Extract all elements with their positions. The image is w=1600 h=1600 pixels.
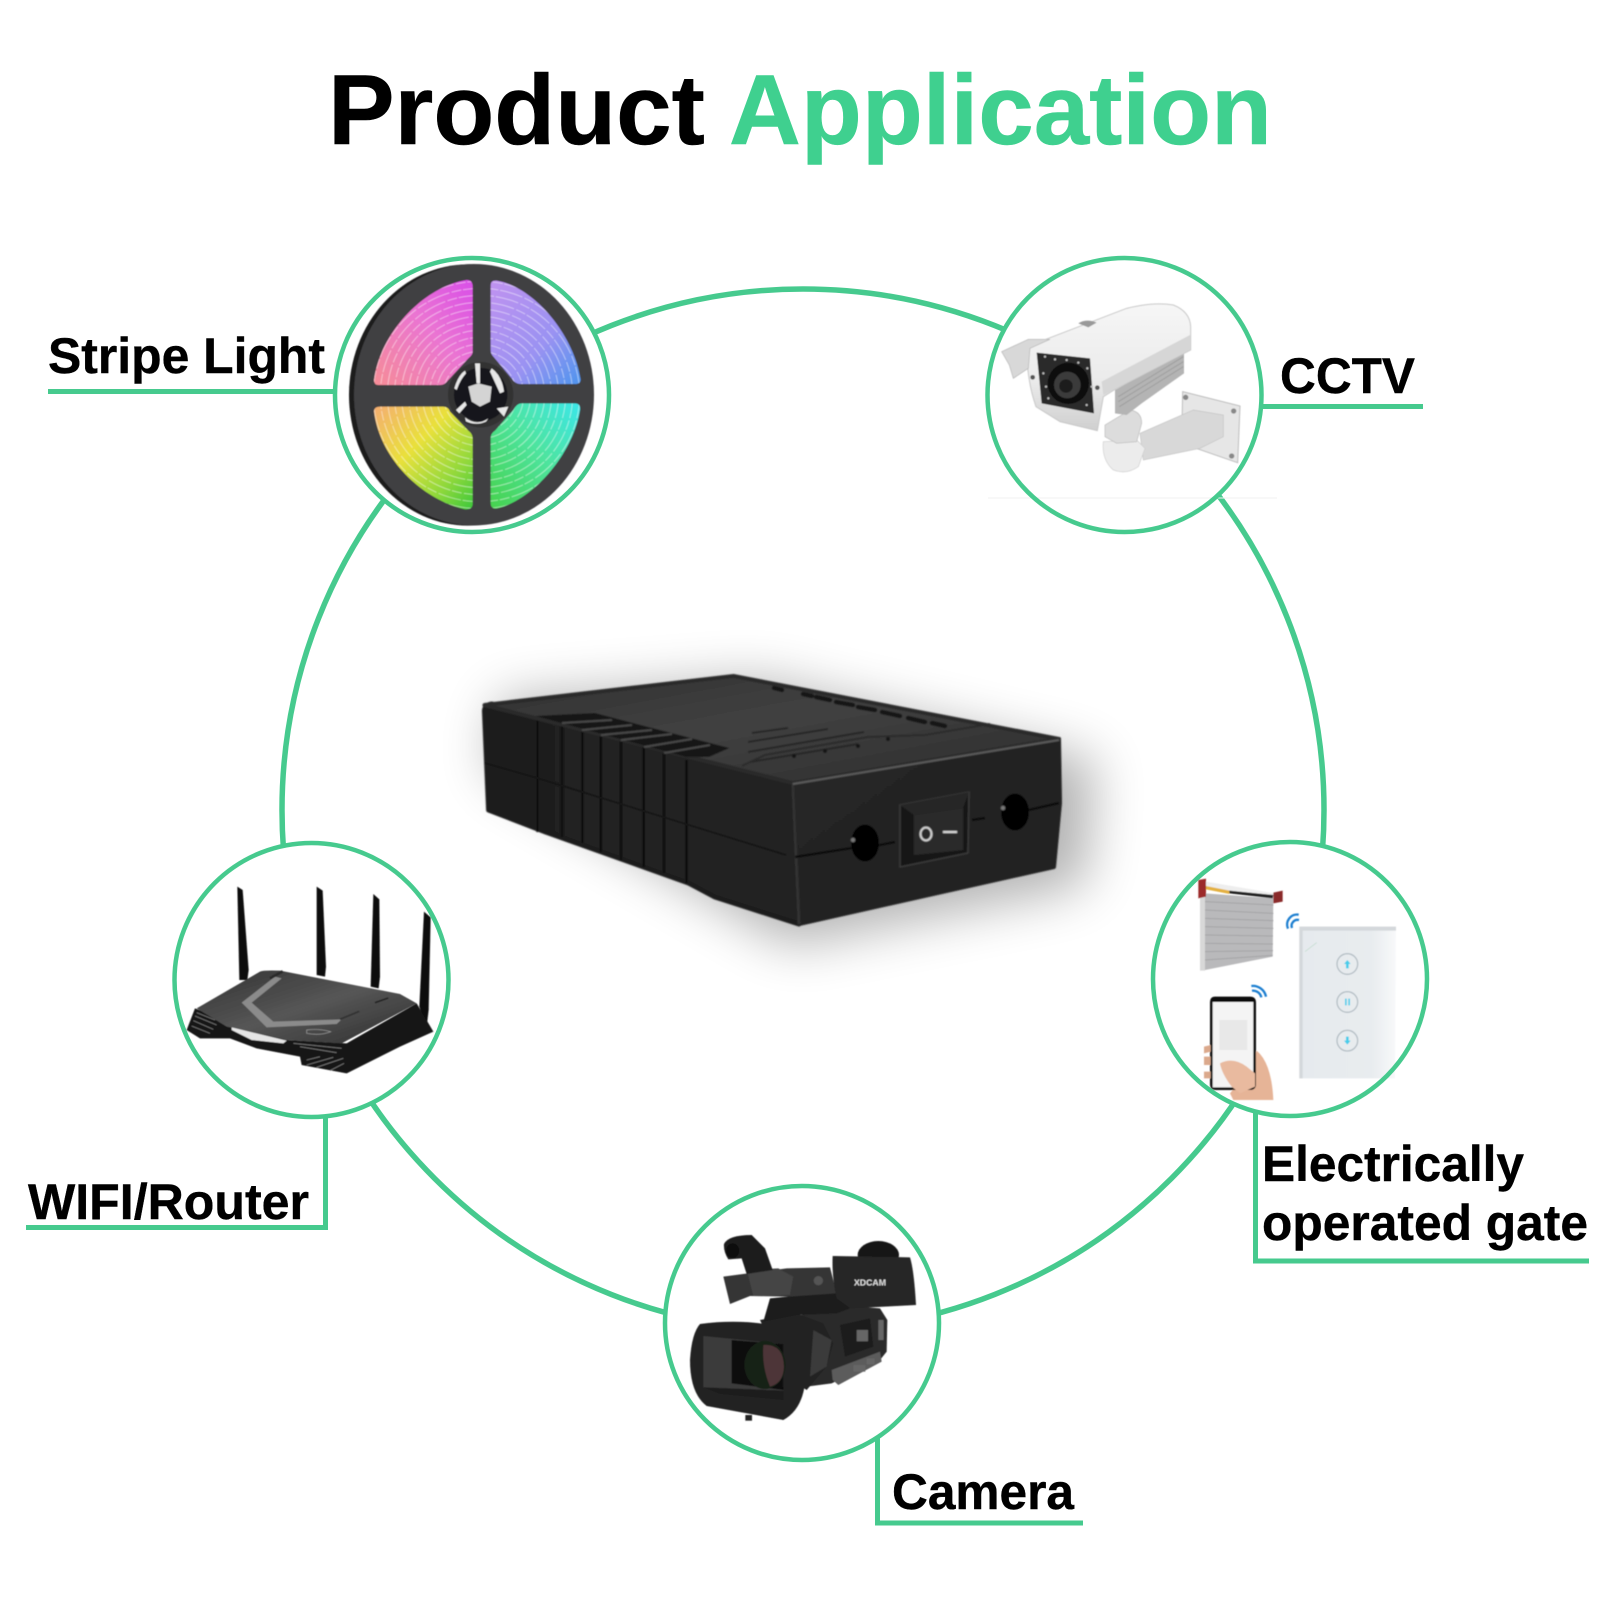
label: WIFI/Router <box>26 1114 326 1230</box>
gate, wall switch and phone <box>1198 879 1396 1100</box>
sun hood <box>1002 339 1050 378</box>
side seam <box>484 763 786 855</box>
housing <box>1027 304 1191 431</box>
wall bracket <box>1182 392 1240 463</box>
chevron accent <box>242 977 342 1027</box>
circle: Stripe Light <box>335 258 609 532</box>
eyecup <box>858 1241 899 1269</box>
strip windings <box>366 281 594 509</box>
lens barrel <box>760 1313 833 1390</box>
box top face <box>484 676 1059 783</box>
label: CCTV: CCTV <box>1280 348 1416 404</box>
lens hood <box>690 1322 805 1420</box>
wifi marks <box>1251 915 1299 997</box>
top handle <box>723 1267 837 1304</box>
connecting ring <box>282 289 1324 1331</box>
label: Camera <box>878 1437 1083 1523</box>
circle: Camera <box>665 1186 939 1460</box>
antennas <box>237 887 431 1027</box>
label: Camera: Camera <box>892 1464 1075 1520</box>
flip-out screen <box>832 1256 916 1308</box>
handle mount <box>763 1292 850 1322</box>
vents and indicator dots <box>742 724 990 766</box>
wall touch switch <box>1299 927 1396 1078</box>
label: WIFI/Router: WIFI/Router <box>28 1174 309 1230</box>
router <box>187 887 433 1073</box>
circle: CCTV <box>988 258 1277 532</box>
ring outline <box>174 843 448 1117</box>
XDCAM logo: XDCAM <box>854 1279 886 1288</box>
label: Electrically operated gate: operated gate <box>1262 1195 1588 1251</box>
front seam <box>795 803 1059 857</box>
back edge notches <box>774 688 945 726</box>
right DC port <box>1001 794 1029 830</box>
title: Product Application <box>328 54 1272 165</box>
rear body <box>783 1305 887 1387</box>
box front face <box>793 739 1060 924</box>
vents <box>192 1013 344 1071</box>
label: Electrically operated gate: Electrically <box>1262 1136 1524 1192</box>
left DC port <box>851 824 879 862</box>
phone in hand <box>1204 997 1273 1100</box>
security camera <box>1002 304 1240 472</box>
colour quadrants <box>374 280 473 385</box>
lens front <box>1037 353 1094 413</box>
box side face <box>484 704 799 924</box>
viewfinder <box>724 1235 773 1274</box>
ring outline <box>988 258 1262 532</box>
video camera <box>690 1235 916 1421</box>
ring outline <box>335 258 609 532</box>
underside and feet <box>187 1003 433 1073</box>
ribs <box>538 718 686 883</box>
circle: WIFI/Router <box>174 843 448 1117</box>
rocker switch <box>900 792 969 867</box>
roller gate <box>1198 879 1283 971</box>
housing underside <box>1115 352 1184 415</box>
ring outline <box>665 1186 939 1460</box>
LED strip reel <box>349 264 594 526</box>
reel hub <box>448 362 513 427</box>
ribbed recess on top <box>536 713 729 757</box>
ring outline <box>1153 842 1427 1116</box>
central product: black power box <box>484 676 1095 945</box>
top surface <box>197 970 417 1043</box>
label: Electrically operated gate <box>1256 1112 1589 1261</box>
circle: Electrically operated gate <box>1153 842 1427 1116</box>
drop shadow <box>490 680 1095 945</box>
label: Stripe Light: Stripe Light <box>48 328 325 384</box>
